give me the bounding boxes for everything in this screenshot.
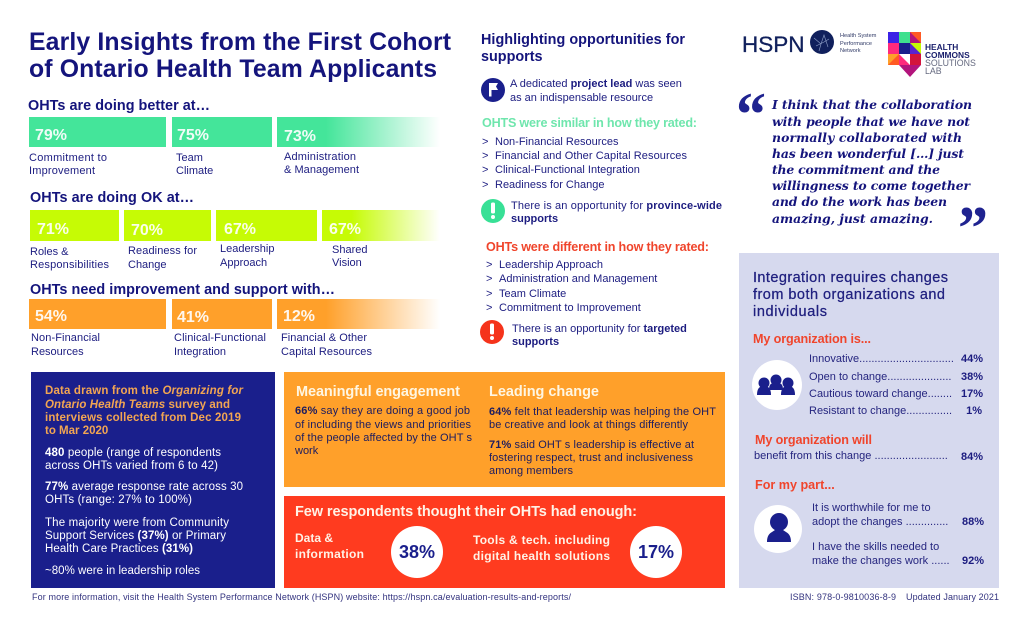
text: data source heading: Data drawn from the Organizing for — [45, 385, 244, 397]
bar: Leadership Approach 67%: Approach — [220, 257, 267, 269]
logo: Health Commons Solutions Lab: COMMONS — [925, 50, 970, 60]
text: sectors: Health Care Practices (31%) — [45, 543, 193, 555]
title: of Ontario Health Team Applicants — [29, 56, 437, 83]
list: similar items: > — [482, 136, 488, 148]
panel: engagement and leading change — [284, 372, 725, 487]
list: organization ratings: Innovative............................... — [809, 353, 954, 365]
icon: closing quote mark: ” — [958, 195, 988, 263]
bar: Clinical-Functional Integration 41% — [172, 299, 272, 358]
bar: Team Climate 75% — [172, 117, 272, 177]
text: province-wide supports: supports — [511, 213, 558, 225]
bar: Shared Vision 67%: Shared — [332, 244, 367, 256]
stat: tools and tech 17% — [473, 526, 682, 578]
list: organization ratings: Resistant to change............... — [809, 405, 952, 417]
text: targeted supports: supports — [512, 336, 559, 348]
bar: Team Climate 75%: Climate — [176, 165, 213, 177]
logo: Health Commons Solutions Lab: LAB — [925, 66, 942, 76]
icon: opening quote mark: “ — [736, 81, 766, 149]
bar: Shared Vision 67% — [322, 210, 440, 269]
list: similar items: > — [482, 164, 488, 176]
quote text: normally collaborated with — [772, 130, 962, 145]
footer: ISBN and update date: Updated January 2021 — [906, 592, 999, 602]
icon: green exclamation — [481, 199, 505, 223]
text: data source heading: interviews collected from Dec 2019 — [45, 412, 241, 424]
heading: few respondents: Few respondents thought their OHTs had enough: — [295, 504, 637, 520]
stat: data and information 38%: information — [295, 547, 364, 561]
panel: integration requires changes — [739, 253, 999, 588]
list: similar items: > — [482, 150, 488, 162]
text: sectors: Support Services (37%) or Primary — [45, 530, 226, 542]
heading: integration: from both organizations and — [753, 287, 945, 303]
text: targeted supports — [512, 323, 687, 348]
text: project lead: A dedicated project lead was seen — [510, 78, 682, 90]
bar: Administration and Management 73%: Administration — [284, 151, 356, 163]
text: project lead: as an indispensable resource — [510, 92, 653, 104]
column: meaningful engagement: Meaningful engagement — [296, 384, 460, 400]
bar: Roles and Responsibilities 71% — [30, 210, 119, 271]
bar: Financial and Other Capital Resources 12% — [277, 299, 440, 358]
list: individual ratings: 92% — [962, 555, 984, 567]
column: meaningful engagement: of the people affected by the OHT s — [295, 432, 472, 444]
bar: Leadership Approach 67%: Leadership — [220, 243, 274, 255]
list: different items: > — [486, 302, 492, 314]
list: different items: > — [486, 288, 492, 300]
bar: Non-Financial Resources 54% — [29, 299, 166, 358]
bar: Team Climate 75%: 75% — [177, 127, 209, 144]
quote text: I think that the collaboration — [771, 97, 972, 112]
list: different items: Administration and Management — [499, 273, 657, 285]
bar: Readiness for Change 70% — [124, 210, 211, 271]
column: leading change: be creative and look at things differently — [489, 419, 688, 431]
heading: different ratings: OHTs were different in how they rated: — [486, 240, 709, 254]
section: OHTs are doing OK at — [30, 190, 440, 271]
column: meaningful engagement: of including the views and priorities — [295, 419, 472, 431]
logo: HSPN — [742, 30, 877, 57]
stat: data and information 38%: Data & — [295, 531, 333, 545]
list: organization ratings — [809, 353, 983, 417]
quote text: the commitment and the — [772, 162, 940, 177]
logo: HSPN: HSPN — [742, 32, 805, 57]
bar: Commitment to Improvement 79% — [29, 117, 166, 177]
list: similar items: Non-Financial Resources — [495, 136, 619, 148]
title: Early Insights from the First Cohort — [29, 29, 451, 56]
quote text: and do the work has been — [772, 194, 947, 209]
text: respondents: 480 people (range of respondents — [45, 447, 221, 459]
heading: highlighting opportunities: supports — [481, 49, 543, 65]
bar: Commitment to Improvement 79%: Commitment to — [29, 152, 107, 164]
bar: Non-Financial Resources 54%: Resources — [31, 346, 84, 358]
column: meaningful engagement: work — [294, 445, 319, 457]
list: organization ratings: 17% — [961, 388, 983, 400]
logo: HSPN: Network — [840, 48, 861, 54]
list: individual ratings: make the changes work ...... — [812, 555, 950, 567]
stat: data and information 38% — [295, 526, 443, 578]
bar: Non-Financial Resources 54%: Non-Financial — [31, 332, 100, 344]
stat: tools and tech 17%: 17% — [638, 542, 674, 562]
panel: highlighting opportunities for supports — [480, 32, 722, 348]
bar: Shared Vision 67%: 67% — [329, 221, 361, 238]
bar: Clinical-Functional Integration 41%: Clinical-Functional — [174, 332, 266, 344]
text: project lead — [510, 78, 682, 104]
text: data source heading: to Mar 2020 — [45, 425, 108, 437]
icon: person — [754, 505, 802, 553]
stat: benefit from this change: 84% — [961, 451, 983, 463]
text: respondents — [45, 447, 221, 472]
column: leading change: among members — [489, 465, 574, 477]
logo: HSPN: Health System — [840, 33, 877, 39]
list: different items: > — [486, 273, 492, 285]
bar: Commitment to Improvement 79%: 79% — [35, 127, 67, 144]
bar: Roles and Responsibilities 71%: 71% — [37, 221, 69, 238]
heading: similar ratings: OHTS were similar in how they rated: — [482, 116, 697, 130]
stat: tools and tech 17%: Tools & tech. including — [473, 533, 610, 547]
quote text: with people that we have not — [772, 114, 970, 129]
bar: Roles and Responsibilities 71%: Roles & — [30, 246, 69, 258]
list: individual ratings: I have the skills needed to — [812, 541, 939, 553]
text: response rate: OHTs (range: 27% to 100%) — [45, 494, 192, 506]
bar: Readiness for Change 70%: 70% — [131, 222, 163, 239]
logo: HSPN: Performance — [840, 41, 872, 47]
subheading: my organization will: My organization will — [755, 433, 872, 447]
subheading: for my part: For my part... — [755, 478, 835, 492]
list: different items: Commitment to Improvement — [499, 302, 641, 314]
footer: more information: For more information, visit the Health System Performance Network (HSPN) website: https://hspn.ca/evaluation-results-and-reports/ — [32, 592, 571, 602]
list: organization ratings: 44% — [961, 353, 983, 365]
text: sectors: The majority were from Community — [45, 517, 229, 529]
bar: Leadership Approach 67% — [216, 210, 317, 269]
icon: flag — [481, 78, 505, 102]
bar: Administration and Management 73% — [277, 117, 440, 176]
list: individual ratings — [812, 502, 984, 567]
panel: data source — [31, 372, 275, 588]
logo: Health Commons Solutions Lab: HEALTH — [925, 42, 958, 52]
icon: group of people — [752, 360, 802, 410]
heading: integration: individuals — [753, 304, 827, 320]
bar: Team Climate 75%: Team — [176, 152, 203, 164]
bar: Financial and Other Capital Resources 12%: Financial & Other — [281, 332, 367, 344]
list: organization ratings: Open to change..................... — [809, 371, 951, 383]
text: leadership roles: ~80% were in leadership roles — [45, 565, 200, 577]
footer: ISBN and update date: ISBN: 978-0-9810036-8-9 — [790, 592, 896, 602]
footer: ISBN and update date — [790, 592, 999, 602]
bar: Leadership Approach 67%: 67% — [224, 221, 256, 238]
list: organization ratings: 1% — [966, 405, 982, 417]
bar: Readiness for Change 70%: Readiness for — [128, 245, 197, 257]
list: similar items — [482, 136, 688, 191]
stat: benefit from this change: benefit from this change ........................ — [754, 450, 948, 462]
heading: need improvement: OHTs need improvement and support with… — [30, 282, 335, 298]
quote text: willingness to come together — [772, 178, 971, 193]
bar: Non-Financial Resources 54%: 54% — [35, 308, 67, 325]
list: individual ratings: It is worthwhile for me to — [812, 502, 931, 514]
section: OHTs are doing better at — [28, 98, 440, 177]
list: similar items: Clinical-Functional Integration — [495, 164, 640, 176]
heading: integration — [753, 270, 948, 320]
logo: Health Commons Solutions Lab — [888, 32, 976, 77]
bar: Clinical-Functional Integration 41%: 41% — [177, 309, 209, 326]
bar: Commitment to Improvement 79%: Improvement — [29, 165, 95, 177]
bar: Administration and Management 73%: 73% — [284, 128, 316, 145]
bar: Financial and Other Capital Resources 12%: Capital Resources — [281, 346, 372, 358]
list: organization ratings: 38% — [961, 371, 983, 383]
bar: Readiness for Change 70%: Change — [128, 259, 167, 271]
bar: Financial and Other Capital Resources 12%: 12% — [283, 308, 315, 325]
list: different items: Leadership Approach — [499, 259, 603, 271]
heading: doing OK: OHTs are doing OK at… — [30, 190, 194, 206]
list: organization ratings: Cautious toward change........ — [809, 388, 952, 400]
stat: data and information 38%: 38% — [399, 542, 435, 562]
icon: red exclamation — [480, 320, 504, 344]
bar: Clinical-Functional Integration 41%: Integration — [174, 346, 226, 358]
list: similar items: > — [482, 179, 488, 191]
list: similar items: Financial and Other Capital Resources — [495, 150, 688, 162]
text: province-wide supports: There is an opportunity for province-wide — [511, 200, 722, 212]
column: leading change: fostering respect, trust and inclusiveness — [489, 452, 694, 464]
column: leading change — [489, 384, 716, 477]
bar: Administration and Management 73%: & Management — [284, 164, 359, 176]
stat: tools and tech 17%: digital health solutions — [473, 549, 610, 563]
heading: highlighting opportunities — [481, 32, 685, 65]
text: data source heading — [45, 385, 244, 437]
text: response rate — [45, 481, 243, 506]
bar: Roles and Responsibilities 71%: Responsibilities — [30, 259, 110, 271]
quote text: has been wonderful […] just — [772, 146, 964, 161]
heading: highlighting opportunities: Highlighting opportunities for — [481, 32, 685, 48]
list: similar items: Readiness for Change — [495, 179, 604, 191]
title — [29, 29, 451, 83]
column: meaningful engagement: 66% say they are doing a good job — [295, 405, 470, 417]
text: targeted supports: There is an opportunity for targeted — [512, 323, 687, 335]
text: data source heading: Ontario Health Teams survey and — [45, 399, 230, 411]
text: respondents: across OHTs varied from 6 to 42) — [45, 460, 218, 472]
list: individual ratings: adopt the changes .............. — [812, 516, 948, 528]
logo: Health Commons Solutions Lab: SOLUTIONS — [925, 58, 976, 68]
quote text — [771, 97, 972, 226]
heading: integration: Integration requires changes — [753, 270, 948, 286]
column: leading change: Leading change — [489, 384, 599, 400]
column: leading change: 64% felt that leadership was helping the OHT — [489, 406, 716, 418]
text: province-wide supports — [511, 200, 722, 225]
column: meaningful engagement — [294, 384, 472, 457]
text: sectors — [45, 517, 229, 555]
heading: doing better: OHTs are doing better at… — [28, 98, 210, 114]
column: leading change: 71% said OHT s leadership is effective at — [489, 439, 694, 451]
text: response rate: 77% average response rate across 30 — [45, 481, 243, 493]
quote text: amazing, just amazing. — [772, 211, 933, 226]
subheading: my organization is: My organization is... — [753, 332, 871, 346]
list: different items — [486, 259, 657, 314]
list: individual ratings: 88% — [962, 516, 984, 528]
section: OHTs need improvement and support with — [29, 282, 440, 358]
panel: few respondents — [284, 496, 725, 588]
quote — [736, 81, 988, 263]
list: different items: Team Climate — [499, 288, 566, 300]
list: different items: > — [486, 259, 492, 271]
bar: Shared Vision 67%: Vision — [332, 257, 362, 269]
